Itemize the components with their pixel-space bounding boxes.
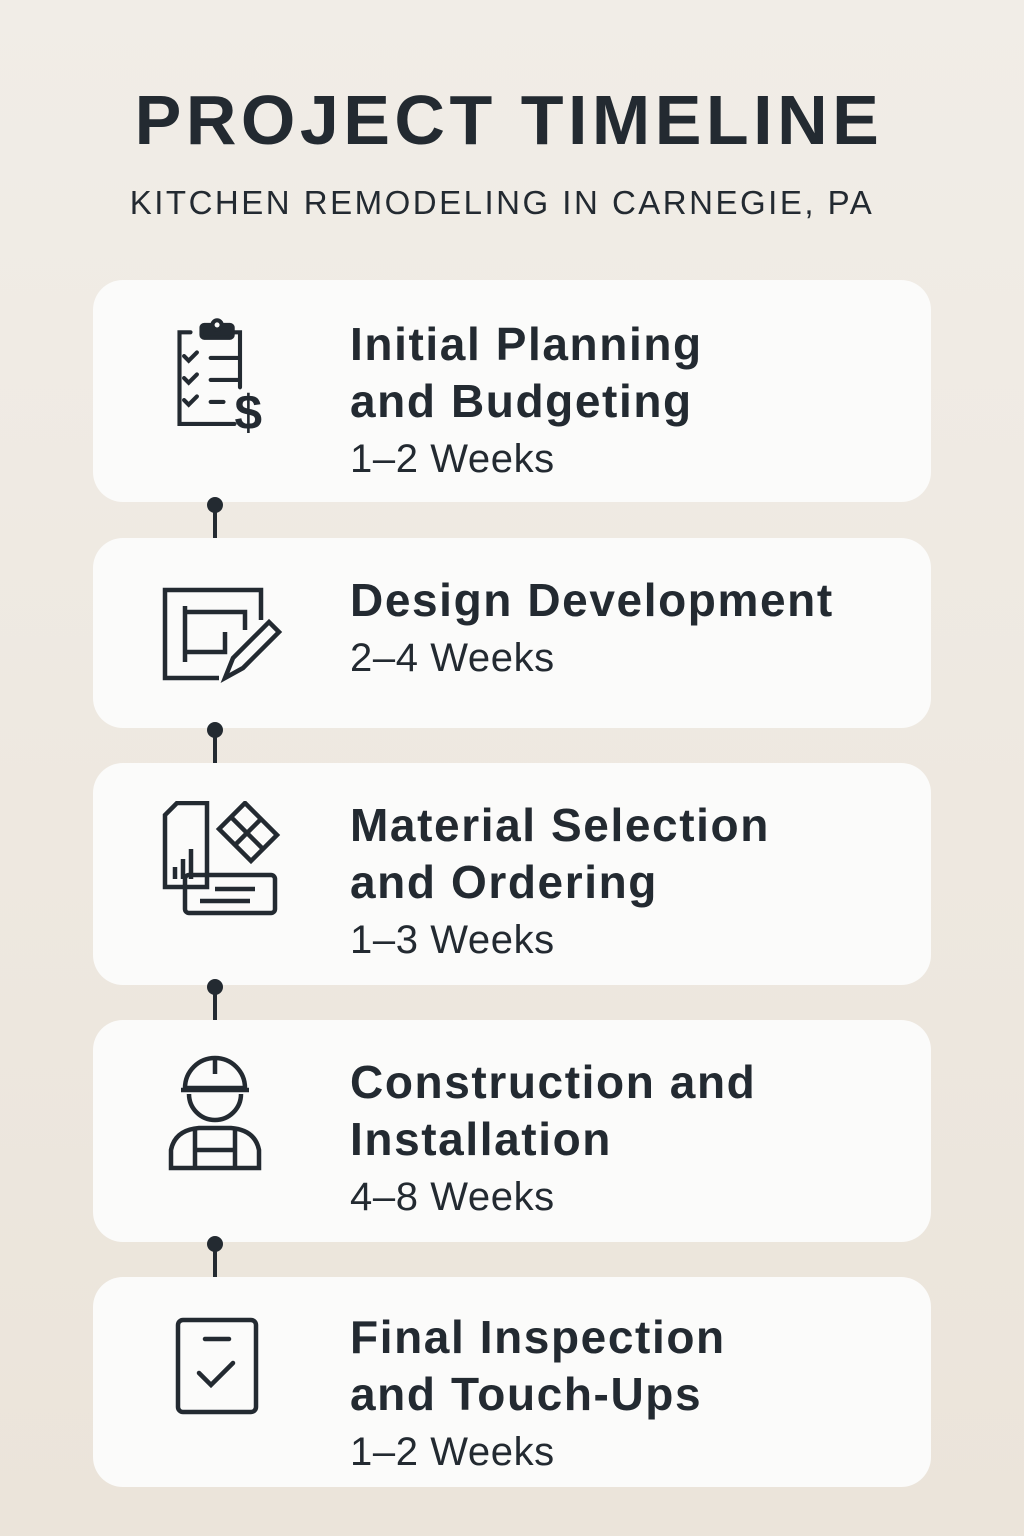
subtitle: KITCHEN REMODELING IN CARNEGIE, PA: [130, 184, 874, 221]
text: 1–3 Weeks: [350, 918, 555, 962]
text: Installation: [350, 1113, 612, 1165]
icon: worker: [168, 1056, 262, 1170]
text: and Budgeting: [350, 375, 693, 427]
card: initial planning: [93, 280, 931, 502]
text: and Touch-Ups: [350, 1368, 702, 1420]
connector: [207, 497, 223, 538]
connector: [207, 722, 223, 763]
icon: blueprint pencil: [162, 588, 282, 683]
text: 2–4 Weeks: [350, 636, 555, 680]
card: construction: [93, 1020, 931, 1242]
icon: swatches: [162, 801, 280, 916]
text: Construction and: [350, 1056, 756, 1108]
text: 1–2 Weeks: [350, 1430, 555, 1474]
icon: clipboard with dollar: $: [234, 385, 262, 440]
text: Final Inspection: [350, 1311, 726, 1363]
text: Design Development: [350, 574, 834, 626]
connector: [207, 1236, 223, 1277]
text: [350, 574, 834, 680]
title: PROJECT TIMELINE: [135, 81, 883, 159]
card: final inspection: [93, 1277, 931, 1487]
text: [350, 799, 770, 962]
connector: [207, 979, 223, 1020]
text: Material Selection: [350, 799, 770, 851]
text: and Ordering: [350, 856, 658, 908]
text: 4–8 Weeks: [350, 1175, 555, 1219]
text: [350, 318, 703, 481]
card: material: [93, 763, 931, 985]
icon: checkbox: [176, 1318, 258, 1414]
icon: clipboard with dollar: [177, 318, 262, 440]
text: 1–2 Weeks: [350, 437, 555, 481]
text: [350, 1311, 726, 1474]
text: Initial Planning: [350, 318, 703, 370]
text: [350, 1056, 756, 1219]
card: design: [93, 538, 931, 728]
